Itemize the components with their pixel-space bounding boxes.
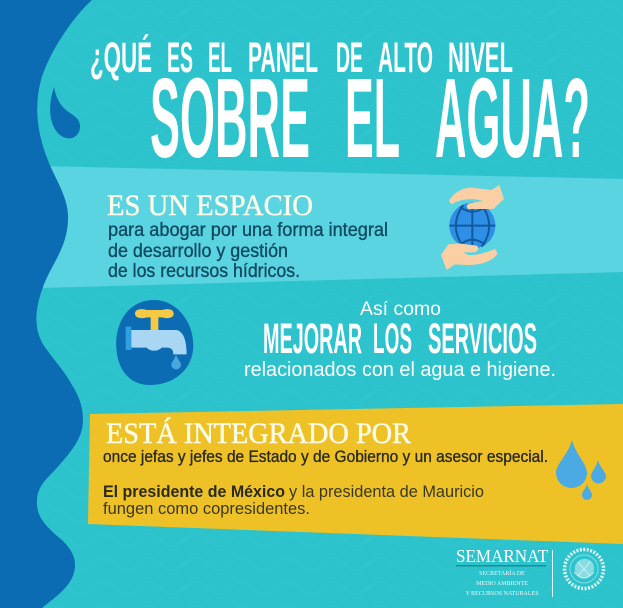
dark blue wavy water column <box>0 0 92 608</box>
panel: está integrado por <box>88 404 623 544</box>
block: mejorar los servicios: relacionados con el agua e higiene. <box>244 359 556 381</box>
icon: hands holding globe <box>441 185 504 270</box>
block: es un espacio: de desarrollo y gestión <box>108 241 288 262</box>
title: SOBRE <box>150 55 310 181</box>
block: es un espacio: de los recursos hídricos. <box>108 261 300 282</box>
logo: semarnat: Y RECURSOS NATURALES <box>465 591 539 597</box>
panel: está integrado por: fungen como copresidentes. <box>103 499 310 518</box>
block: mejorar los servicios: LOS <box>373 315 412 363</box>
title: ES <box>167 34 193 82</box>
water drop accent <box>50 87 80 138</box>
block: mejorar los servicios: Así como <box>360 299 441 320</box>
title: ¿QUÉ <box>90 34 152 82</box>
logo: semarnat: SEMARNAT <box>456 546 548 566</box>
title: DE <box>336 34 363 82</box>
panel: está integrado por: once jefas y jefes de Estado y de Gobierno y un asesor especial. <box>103 447 548 466</box>
block: es un espacio: ES UN ESPACIO <box>107 189 313 222</box>
title: EL <box>345 55 400 181</box>
block: mejorar los servicios: MEJORAR <box>263 315 362 363</box>
icon: water drops <box>556 440 606 500</box>
title: EL <box>208 34 232 82</box>
panel: está integrado por: ESTÁ INTEGRADO POR <box>106 417 411 450</box>
title <box>90 34 590 181</box>
title: ALTO <box>378 34 433 82</box>
icon: water tap <box>116 300 193 385</box>
title: NIVEL <box>448 34 513 82</box>
panel: está integrado por: y la presidenta de Mauricio <box>289 482 484 501</box>
block: es un espacio <box>107 189 388 282</box>
logo: semarnat <box>456 546 553 597</box>
title: PANEL <box>248 34 318 82</box>
block: mejorar los servicios <box>244 299 556 381</box>
block: es un espacio: para abogar por una forma integral <box>108 220 388 241</box>
light blue band <box>40 166 623 288</box>
panel: está integrado por: El presidente de México <box>103 482 285 501</box>
logo: semarnat: SECRETARÍA DE <box>479 569 525 577</box>
logo: semarnat: MEDIO AMBIENTE <box>476 581 528 587</box>
seal <box>564 550 604 588</box>
